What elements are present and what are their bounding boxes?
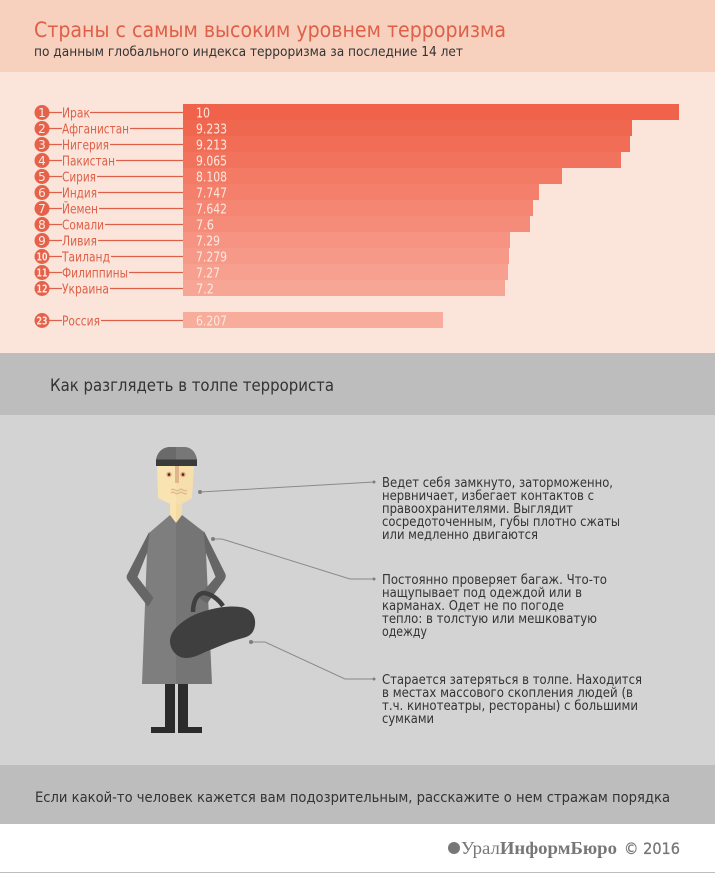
bar values: 9.233 bbox=[196, 122, 227, 138]
title: Страны с самым высоким уровнем терроризма bbox=[34, 18, 506, 42]
bar values: 9.213 bbox=[196, 138, 227, 154]
pointer: bag bbox=[249, 640, 376, 680]
rank numbers: 7 bbox=[38, 202, 46, 216]
rank numbers: 12 bbox=[36, 282, 48, 296]
country names: Нигерия bbox=[62, 138, 109, 154]
rank numbers: 4 bbox=[38, 154, 46, 168]
text block: crowds bbox=[382, 673, 642, 727]
rank numbers: 23 bbox=[36, 314, 48, 328]
text block: behaviour: правоохранителями. Выглядит bbox=[382, 502, 573, 517]
rank numbers: 11 bbox=[36, 266, 48, 280]
call to action: Если какой-то человек кажется вам подозрительным, расскажите о нем стражам порядка bbox=[35, 790, 670, 806]
country names: Сирия bbox=[62, 170, 96, 186]
bar values: 7.2 bbox=[196, 282, 214, 298]
rank numbers: 6 bbox=[38, 186, 46, 200]
rank badges bbox=[34, 105, 50, 328]
leader lines bbox=[49, 112, 183, 320]
bar values: 7.279 bbox=[196, 250, 227, 266]
text block: luggage and clothes bbox=[382, 572, 607, 640]
section heading: Как разглядеть в толпе террориста bbox=[50, 376, 334, 396]
country names: Ливия bbox=[62, 234, 97, 250]
text block: luggage and clothes: одежду bbox=[382, 625, 427, 640]
bar values: 7.642 bbox=[196, 202, 227, 218]
country names: Пакистан bbox=[62, 154, 115, 170]
logo text: УралИнформБюро bbox=[461, 838, 617, 858]
mouth bbox=[171, 489, 187, 494]
bar values: 7.6 bbox=[196, 218, 214, 234]
text block: luggage and clothes: карманах. Одет не по погоде bbox=[382, 599, 564, 614]
arms bbox=[127, 532, 225, 606]
bag bbox=[170, 607, 255, 658]
text block: crowds: в местах массового скопления людей (в bbox=[382, 686, 633, 701]
text block: luggage and clothes: Постоянно проверяет багаж. Что-то bbox=[382, 572, 607, 588]
rank numbers: 8 bbox=[38, 218, 46, 232]
country names: Йемен bbox=[62, 200, 98, 218]
country names: Ирак bbox=[62, 106, 90, 122]
text block: behaviour: сосредоточенным, губы плотно сжаты bbox=[382, 514, 620, 530]
pointer: coat bbox=[211, 537, 376, 580]
rank numbers: 9 bbox=[38, 234, 46, 248]
rank numbers: 10 bbox=[36, 250, 48, 264]
bars bbox=[183, 104, 679, 328]
bar chart: terrorism index bbox=[34, 104, 679, 330]
neck and face bbox=[157, 466, 194, 523]
rank numbers: 3 bbox=[38, 138, 46, 152]
text block: behaviour: нервничает, избегает контактов с bbox=[382, 488, 594, 504]
text block: crowds: Старается затеряться в толпе. Находится bbox=[382, 673, 642, 688]
text block: luggage and clothes: нащупывает под одеждой или в bbox=[382, 586, 582, 601]
country names: Афганистан bbox=[62, 122, 129, 138]
bar values: 8.108 bbox=[196, 170, 227, 186]
nose bbox=[175, 466, 179, 483]
bar values: 6.207 bbox=[196, 314, 227, 330]
rank numbers: 1 bbox=[38, 106, 46, 120]
bar values: 7.27 bbox=[196, 266, 220, 282]
figure: suspicious man with bag bbox=[127, 447, 255, 733]
country names: Россия bbox=[62, 314, 100, 330]
text block: behaviour: Ведет себя замкнуто, заторможенно, bbox=[382, 475, 613, 491]
country names: Таиланд bbox=[61, 250, 110, 266]
bar values bbox=[196, 106, 227, 330]
hat bbox=[156, 447, 197, 466]
rank numbers: 5 bbox=[38, 170, 46, 184]
text block: behaviour: или медленно двигаются bbox=[382, 528, 538, 543]
country names: Индия bbox=[62, 186, 97, 202]
country names: Сомали bbox=[62, 218, 104, 234]
bar values: 10 bbox=[196, 106, 210, 122]
legs bbox=[151, 684, 202, 733]
logo dot bbox=[448, 842, 460, 854]
text block: crowds: сумками bbox=[382, 712, 434, 727]
country names bbox=[61, 106, 129, 330]
footer logo and copyright bbox=[448, 838, 680, 858]
country names: Украина bbox=[62, 282, 109, 298]
text block: luggage and clothes: тепло: в толстую или мешковатую bbox=[382, 612, 597, 627]
eyes bbox=[166, 472, 186, 477]
text block: crowds: т.ч. кинотеатры, рестораны) с большими bbox=[382, 698, 638, 714]
copyright: © 2016 bbox=[624, 839, 680, 858]
text block: behaviour bbox=[382, 475, 620, 543]
bar values: 7.29 bbox=[196, 234, 220, 250]
rank numbers bbox=[36, 106, 48, 328]
rank numbers: 2 bbox=[38, 122, 46, 136]
pointer lines bbox=[198, 480, 376, 680]
bar values: 7.747 bbox=[196, 186, 227, 202]
pointer: face bbox=[198, 480, 376, 494]
country names: Филиппины bbox=[62, 266, 128, 282]
coat bbox=[142, 515, 212, 684]
subtitle: по данным глобального индекса терроризма за последние 14 лет bbox=[34, 44, 463, 60]
bar values: 9.065 bbox=[196, 154, 227, 170]
bag handle bbox=[193, 593, 223, 612]
